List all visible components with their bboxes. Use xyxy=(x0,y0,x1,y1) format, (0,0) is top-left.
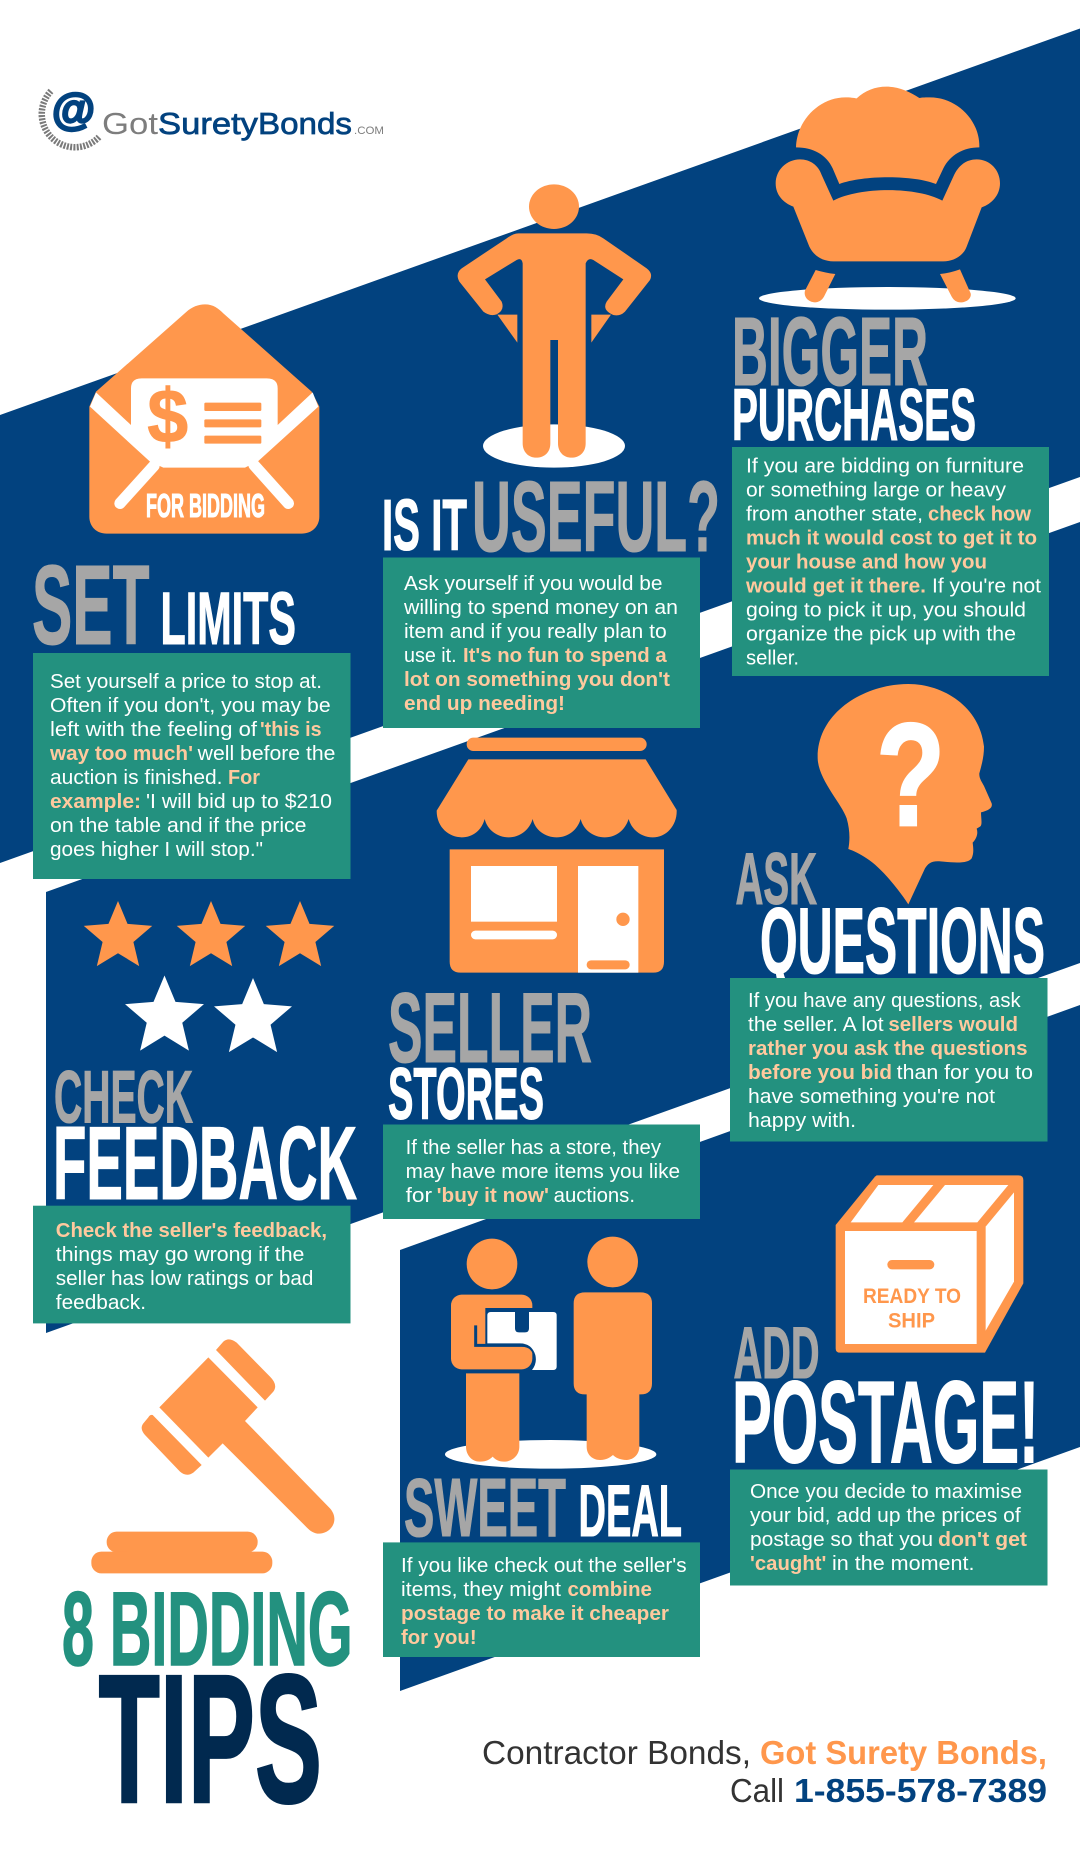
panel: Bigger Purchases text: going to pick it up, you should xyxy=(746,600,1026,622)
panel: Set Limits text: way too much' xyxy=(49,743,193,765)
panel: Set Limits text: 'this is xyxy=(260,719,322,741)
panel: Ask Questions text: sellers would xyxy=(888,1014,1018,1036)
footer: contact call to action: Contractor Bonds, xyxy=(482,1734,751,1771)
label: ready to ship: READY TO xyxy=(863,1285,961,1308)
panel: Ask Questions text: than for you to xyxy=(897,1062,1033,1084)
panel: Is it useful text: It's no fun to spend a xyxy=(463,645,668,667)
footer: contact call to action: 1-855-578-7389 xyxy=(794,1772,1047,1809)
background band: lower diagonal xyxy=(400,1005,1080,1691)
panel: Bigger Purchases text: would get it there. xyxy=(745,576,926,598)
heading: Sweet Deal: SWEET xyxy=(404,1461,566,1554)
heading: Seller Stores xyxy=(388,972,592,1135)
panel: Set Limits text: left with the feeling of xyxy=(50,719,257,741)
logo wordmark: Surety xyxy=(158,106,259,141)
heading: Check Feedback xyxy=(53,1056,357,1222)
panel: Bigger Purchases text: If you're not xyxy=(932,576,1041,598)
panel: Sweet Deal text: combine xyxy=(568,1579,652,1601)
logo: GotSuretyBonds.com xyxy=(42,85,384,147)
icon: armchair xyxy=(759,87,1016,310)
panel: Set Limits text: example: xyxy=(50,791,141,813)
panel: Add Postage text: Once you decide to maximise xyxy=(750,1481,1022,1503)
panel: Check Feedback text xyxy=(33,1206,350,1323)
panel: Seller Stores text: 'buy it now' xyxy=(437,1185,549,1207)
panel: Sweet Deal text: items, they might xyxy=(401,1579,561,1601)
heading: Is it useful?: USEFUL? xyxy=(472,461,720,573)
icon: gavel xyxy=(91,1339,334,1573)
panel: Ask Questions text: happy with. xyxy=(748,1110,856,1132)
heading: Add Postage xyxy=(732,1313,1039,1488)
heading: Sweet Deal: DEAL xyxy=(578,1471,682,1552)
panel: Set Limits text: goes higher I will stop." xyxy=(50,839,263,861)
background band: upper diagonal xyxy=(0,28,1080,863)
panel: Is it useful text xyxy=(383,558,700,728)
icon: gear with at sign xyxy=(42,85,99,147)
panel: Add Postage text: postage so that you xyxy=(750,1529,933,1551)
panel: Check Feedback text: seller has low ratings or bad xyxy=(56,1268,313,1290)
panel: Set Limits text: For xyxy=(228,767,260,789)
panel: Bigger Purchases text: organize the pick up with the xyxy=(746,624,1016,646)
heading: Is it useful? xyxy=(382,461,720,573)
panel: Bigger Purchases text: If you are bidding on furniture xyxy=(746,456,1024,478)
heading: Seller Stores: SELLER xyxy=(388,972,592,1083)
background band: middle diagonal xyxy=(46,522,1080,1333)
panel: Ask Questions text: before you bid xyxy=(748,1062,892,1084)
panel: Is it useful text: use it. xyxy=(404,645,457,667)
panel: Bigger Purchases text: check how xyxy=(928,504,1031,526)
icon: person with empty pockets xyxy=(458,184,651,468)
heading: Set Limits: LIMITS xyxy=(160,577,296,660)
panel: Ask Questions text: have something you're not xyxy=(748,1086,995,1108)
title: 8 Bidding Tips xyxy=(62,1571,353,1841)
panel: Ask Questions text xyxy=(730,978,1048,1142)
panel: Is it useful text: willing to spend money on an xyxy=(403,597,678,619)
panel: Set Limits text: 'I will bid up to $210 xyxy=(146,791,332,813)
panel: Is it useful text: item and if you really plan to xyxy=(404,621,667,643)
label: for bidding: FOR BIDDING xyxy=(146,487,265,524)
heading: Check Feedback: CHECK xyxy=(54,1056,193,1138)
footer: contact call to action: Call xyxy=(730,1772,784,1809)
heading: Set Limits: SET xyxy=(32,542,150,668)
panel: Ask Questions text: the seller. A lot xyxy=(748,1014,884,1036)
icon: gear with at sign: @ xyxy=(52,85,95,134)
panel: Sweet Deal text: postage to make it cheaper xyxy=(401,1603,669,1625)
title: 8 Bidding Tips: TIPS xyxy=(98,1636,322,1841)
heading: Ask Questions: ASK xyxy=(736,839,817,920)
panel: Set Limits text xyxy=(33,653,350,879)
icon: head with question mark xyxy=(818,684,992,904)
label: ready to ship: SHIP xyxy=(888,1310,935,1332)
panel: Check Feedback text: things may go wrong if the xyxy=(56,1244,304,1266)
icon: envelope with bid: $ xyxy=(147,375,188,460)
panel: Check Feedback text: Check the seller's feedback, xyxy=(56,1220,327,1242)
panel: Set Limits text: auction is finished. xyxy=(50,767,222,789)
panel: Seller Stores text: may have more items you like xyxy=(406,1161,680,1183)
icon: five stars xyxy=(84,901,334,1052)
panel: Bigger Purchases text: or something large or heavy xyxy=(746,480,1006,502)
heading: Ask Questions xyxy=(736,839,1045,993)
icon: shipping box xyxy=(836,1175,1023,1353)
panel: Sweet Deal text: If you like check out the seller's xyxy=(401,1555,687,1577)
panel: Sweet Deal text: for you! xyxy=(401,1627,477,1649)
panel: Bigger Purchases text: much it would cost to get it to xyxy=(746,528,1037,550)
logo wordmark: Got xyxy=(102,106,158,141)
panel: Add Postage text: don't get xyxy=(938,1529,1027,1551)
panel: Is it useful text: lot on something you don't xyxy=(404,669,670,691)
panel: Seller Stores text: auctions. xyxy=(554,1185,635,1207)
panel: Set Limits text: Set yourself a price to stop at. xyxy=(50,671,322,693)
panel: Set Limits text: Often if you don't, you may be xyxy=(50,695,331,717)
panel: Add Postage text: in the moment. xyxy=(832,1553,974,1575)
heading: Add Postage: ADD xyxy=(734,1313,820,1394)
panel: Ask Questions text: rather you ask the questions xyxy=(748,1038,1028,1060)
panel: Seller Stores text: If the seller has a store, they xyxy=(406,1137,661,1159)
panel: Sweet Deal text xyxy=(383,1542,700,1657)
icon: head with question mark: ? xyxy=(876,693,945,857)
panel: Add Postage text: your bid, add up the prices of xyxy=(750,1505,1021,1527)
panel: Is it useful text: Ask yourself if you would be xyxy=(404,573,662,595)
logo wordmark: Bonds xyxy=(258,106,352,141)
panel: Seller Stores text: for xyxy=(406,1185,432,1207)
panel: Check Feedback text: feedback. xyxy=(56,1292,146,1314)
footer: contact call to action xyxy=(482,1734,1047,1809)
panel: Seller Stores text xyxy=(383,1124,700,1219)
panel: Bigger Purchases text: seller. xyxy=(746,648,799,670)
panel: Add Postage text: 'caught' xyxy=(750,1553,826,1575)
icon: two people exchanging a parcel xyxy=(445,1237,656,1469)
icon: storefront xyxy=(437,738,677,973)
logo wordmark: .COM xyxy=(354,125,384,137)
panel: Bigger Purchases text: from another state, xyxy=(746,504,923,526)
label: ready to ship xyxy=(863,1285,961,1332)
heading: Bigger Purchases xyxy=(732,297,976,456)
footer: contact call to action: Got Surety Bonds, xyxy=(760,1734,1047,1771)
panel: Is it useful text: end up needing! xyxy=(404,693,565,715)
panel: Bigger Purchases text xyxy=(732,447,1049,676)
icon: envelope with bid xyxy=(89,304,319,534)
panel: Ask Questions text: If you have any questions, ask xyxy=(748,990,1022,1012)
heading: Check Feedback: FEEDBACK xyxy=(53,1106,357,1222)
logo wordmark xyxy=(102,106,384,141)
panel: Set Limits text: well before the xyxy=(197,743,335,765)
heading: Seller Stores: STORES xyxy=(388,1054,544,1135)
title: 8 Bidding Tips: 8 BIDDING xyxy=(62,1571,353,1688)
panel: Bigger Purchases text: your house and how you xyxy=(746,552,987,574)
heading: Is it useful?: IS IT xyxy=(382,486,467,566)
panel: Set Limits text: on the table and if the price xyxy=(50,815,306,837)
panel: Add Postage text xyxy=(730,1470,1048,1586)
